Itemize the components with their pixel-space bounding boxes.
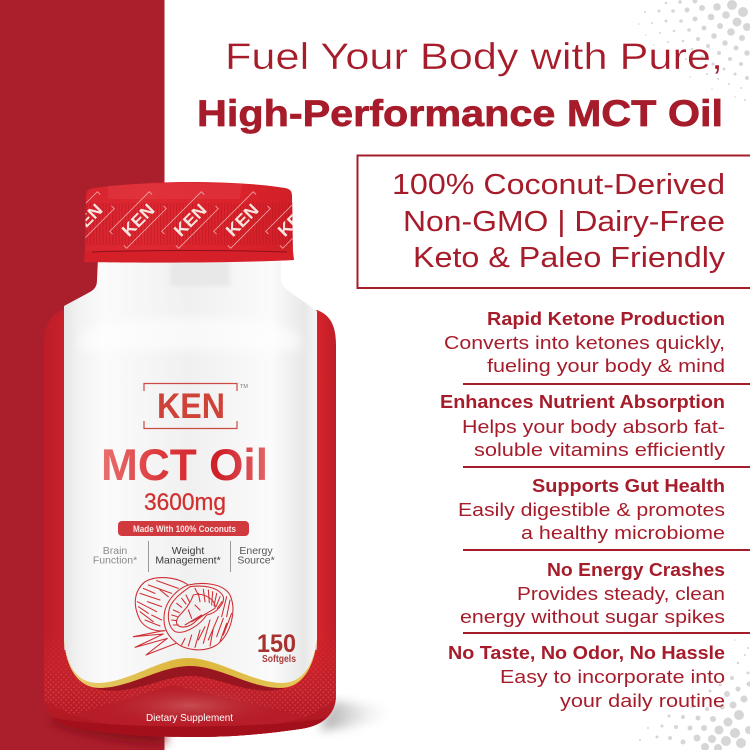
- callout box: product claims: [358, 156, 750, 288]
- bottle body and neck: [64, 258, 317, 650]
- benefit: supports gut health: Supports Gut Health: [532, 475, 725, 496]
- dietary supplement: Dietary Supplement: [146, 712, 233, 724]
- softgel count: Softgels: [262, 653, 296, 665]
- shadow on red panel: [50, 715, 166, 744]
- coconut illustration: [133, 578, 233, 655]
- bottle silhouette with side strips: [44, 310, 336, 737]
- coconut badge: Made With 100% Coconuts: [133, 524, 236, 535]
- benefit: rapid ketone production: fueling your body & mind: [487, 355, 725, 376]
- callout box: product claims: 100% Coconut-Derived: [392, 169, 725, 201]
- KEN logo: TM: [240, 384, 248, 390]
- headline: [197, 36, 723, 134]
- cap KEN marks: [85, 191, 293, 249]
- benefit: no taste, no odor, no hassle: Easy to incorporate into: [500, 666, 725, 687]
- halftone band: [44, 646, 336, 716]
- cap ridges: [85, 203, 293, 245]
- bottle: [44, 182, 400, 744]
- benefit: supports gut health: a healthy microbiome: [521, 522, 725, 543]
- benefit: no taste, no odor, no hassle: No Taste, No Odor, No Hassle: [448, 642, 725, 663]
- KEN logo: KEN: [157, 387, 225, 426]
- benefits on label: Energy: [239, 545, 273, 557]
- red background panel: [0, 0, 164, 750]
- callout box: product claims: Non-GMO | Dairy-Free: [403, 206, 725, 238]
- callout box: product claims: Keto & Paleo Friendly: [413, 242, 726, 274]
- cap KEN marks: KEN: [274, 200, 315, 241]
- halftone dots: top right: [638, 0, 750, 101]
- benefit: no energy crashes: energy without sugar spikes: [460, 606, 725, 627]
- benefits on label: Management*: [155, 554, 221, 566]
- product name: MCT Oil: [101, 441, 268, 490]
- halftone dots: bottom right: [639, 639, 750, 750]
- dark band beneath ribbon: [94, 664, 286, 691]
- benefits on label: Weight: [172, 545, 204, 557]
- benefit: rapid ketone production: [444, 308, 725, 376]
- benefit: supports gut health: [458, 475, 725, 543]
- cap KEN marks: KEN: [222, 200, 263, 241]
- benefit: enhances nutrient absorption: soluble vitamins efficiently: [474, 439, 726, 460]
- label bottom with gold ribbon: [64, 640, 317, 688]
- benefit: rapid ketone production: Rapid Ketone Production: [487, 308, 725, 329]
- benefit: rapid ketone production: Converts into ketones quickly,: [444, 332, 725, 353]
- headline: High-Performance MCT Oil: [197, 92, 723, 134]
- benefit: enhances nutrient absorption: Helps your body absorb fat-: [462, 416, 725, 437]
- benefits on label: Function*: [93, 554, 137, 566]
- cap KEN marks: KEN: [170, 200, 211, 241]
- benefit: no taste, no odor, no hassle: [448, 642, 725, 711]
- headline: Fuel Your Body with Pure,: [225, 36, 723, 77]
- cap body: [85, 182, 293, 253]
- dosage: 3600mg: [144, 489, 226, 516]
- benefits on label: [93, 541, 275, 572]
- benefit: no energy crashes: Provides steady, clean: [517, 583, 725, 604]
- coconut badge: [118, 521, 249, 536]
- bottle base band: [44, 642, 336, 737]
- benefit: no energy crashes: [460, 559, 725, 627]
- benefit: supports gut health: Easily digestible & promotes: [458, 499, 725, 520]
- bottle shadow: [320, 702, 400, 730]
- benefit: enhances nutrient absorption: [440, 391, 726, 460]
- benefit: enhances nutrient absorption: Enhances Nutrient Absorption: [440, 391, 725, 412]
- neck highlights: [170, 262, 230, 286]
- softgel count: 150: [257, 630, 296, 658]
- cap KEN marks: KEN: [118, 200, 159, 241]
- benefits on label: Brain: [103, 545, 127, 557]
- benefit: no taste, no odor, no hassle: your daily routine: [560, 690, 725, 711]
- bottle cap: [84, 182, 294, 263]
- cap KEN marks: KEN: [66, 200, 107, 241]
- benefits on label: Source*: [237, 554, 275, 566]
- benefit: no energy crashes: No Energy Crashes: [547, 559, 725, 580]
- KEN logo: [144, 384, 248, 428]
- cap lip: [84, 250, 294, 263]
